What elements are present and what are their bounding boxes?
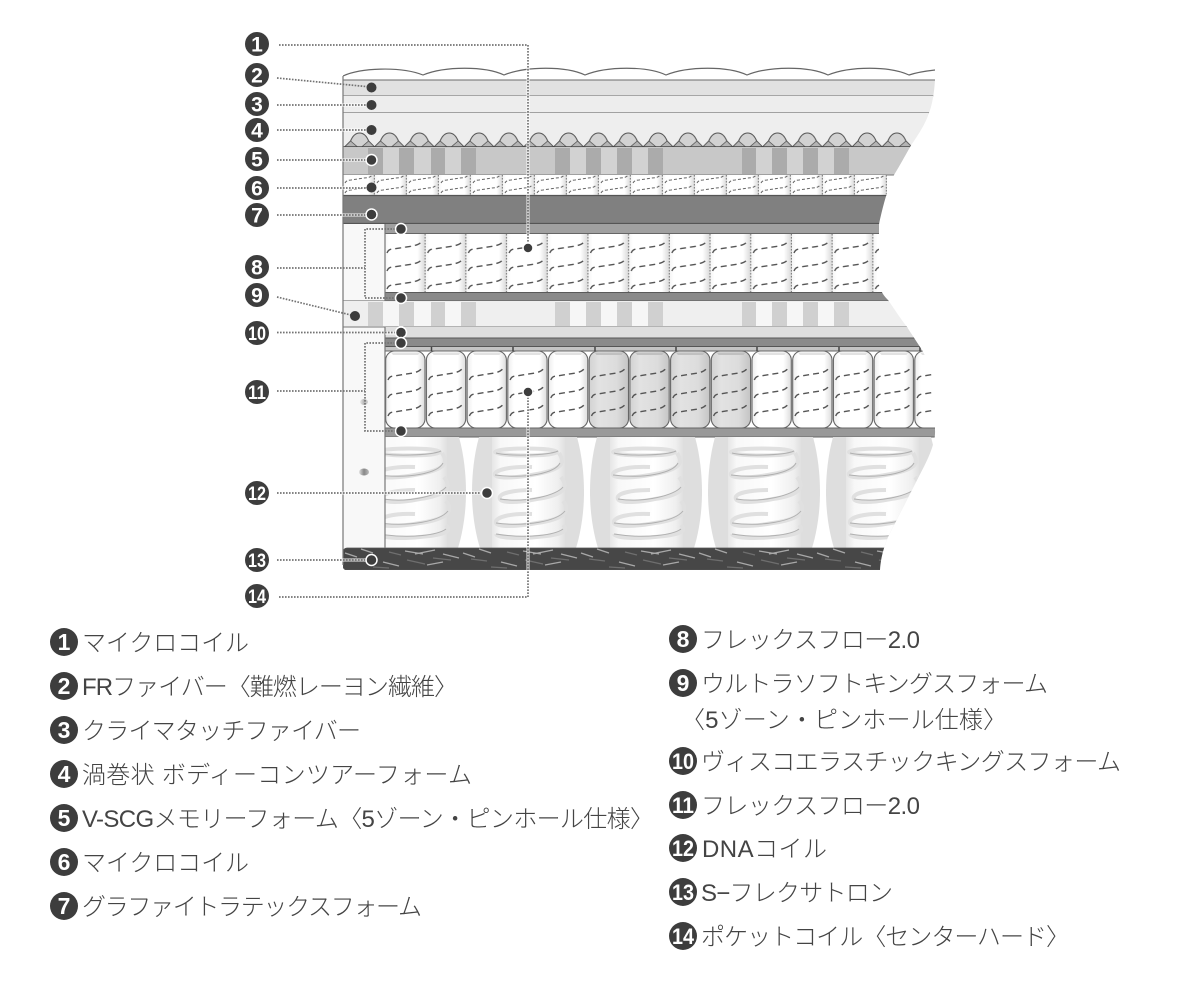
legend item 8: フレックスフロー2.0 xyxy=(701,627,920,654)
layer 3: climate touch fiber xyxy=(343,96,943,113)
legend item 9: 9 xyxy=(677,670,689,696)
legend item 14: 14 xyxy=(672,924,695,949)
diagram number badges: 9 xyxy=(251,284,263,308)
layer 8: flex flow 2.0 xyxy=(343,224,945,301)
legend item 4: 4 xyxy=(58,761,71,787)
layer 4: convoluted foam xyxy=(343,113,945,148)
legend item 13: 13 xyxy=(672,880,694,905)
legend item 11: フレックスフロー2.0 xyxy=(701,793,920,820)
diagram number badges: 1 xyxy=(251,34,263,56)
side panel outlines xyxy=(343,76,385,565)
mattress cross-section diagram xyxy=(343,68,954,570)
pinholes in side panel xyxy=(359,399,369,476)
layer 7: graphite latex foam xyxy=(343,195,943,224)
layer 13: S-flexatron base xyxy=(343,548,943,570)
legend item 6: 6 xyxy=(58,849,70,875)
diagram number badges: 8 xyxy=(251,256,263,280)
diagram number badges: 13 xyxy=(248,551,266,572)
legend item 13: S−フレクサトロン xyxy=(701,880,893,907)
pocket coils with DNA coil springs xyxy=(386,437,933,548)
layer 11: flex flow 2.0 bottom plate xyxy=(385,428,945,437)
diagram number badges: 10 xyxy=(248,324,266,345)
top quilted cover xyxy=(343,68,935,76)
legend item 4: 渦巻状 ボディーコンツアーフォーム xyxy=(82,762,472,789)
layer 5: V-SCG memory foam with pinhole strips xyxy=(343,147,943,175)
diagram number badges: 2 xyxy=(251,64,263,88)
legend item 12: DNAコイル xyxy=(702,836,827,863)
layer 2: FR fiber xyxy=(343,80,943,96)
legend item 10: ヴィスコエラスチックキングスフォーム xyxy=(701,749,1121,776)
side panel xyxy=(344,224,384,225)
legend item 3: 3 xyxy=(58,717,70,743)
legend: right column xyxy=(669,625,1121,951)
legend item 9 xyxy=(669,669,1048,734)
legend item 2: FRファイバー〈難燃レーヨン繊維〉 xyxy=(82,674,458,701)
legend item 3: クライマタッチファイバー xyxy=(82,718,361,745)
legend item 2: 2 xyxy=(58,673,70,699)
diagram number badges: 7 xyxy=(251,204,263,228)
legend item 5: V-SCGメモリーフォーム〈5ゾーン・ピンホール仕様〉 xyxy=(82,806,654,833)
legend item 1: マイクロコイル xyxy=(82,630,249,657)
legend item 14: ポケットコイル〈センターハード〉 xyxy=(701,924,1070,951)
diagram number badges: 12 xyxy=(248,484,266,505)
diagram number badges: 5 xyxy=(251,148,263,172)
leader lines xyxy=(277,45,528,597)
legend item 12: 12 xyxy=(672,836,694,861)
leader end markers xyxy=(350,82,533,566)
layer 11: flex flow 2.0 top plate xyxy=(385,338,945,351)
legend item 7: グラファイトラテックスフォーム xyxy=(82,894,422,921)
layer 10: viscoelastic king foam xyxy=(385,327,945,338)
legend item 8: 8 xyxy=(677,626,690,652)
legend item 5: 5 xyxy=(58,805,71,831)
diagram number badges: 4 xyxy=(251,120,263,142)
diagram number badges: 3 xyxy=(251,94,263,116)
layer 9: ultra soft king foam xyxy=(343,301,945,327)
diagram number badges: 6 xyxy=(251,178,263,200)
layer 6: micro coil xyxy=(343,175,887,195)
legend item 9: ウルトラソフトキングスフォーム xyxy=(701,671,1048,698)
diagram number badges xyxy=(245,32,269,608)
legend item 7: 7 xyxy=(58,893,70,919)
pocketed coils row xyxy=(386,351,954,428)
legend item 1: 1 xyxy=(58,629,71,655)
diagram number badges: 11 xyxy=(248,383,266,404)
diagram number badges: 14 xyxy=(248,587,266,608)
legend item 10: 10 xyxy=(672,749,694,774)
legend item 9: 〈5ゾーン・ピンホール仕様〉 xyxy=(681,707,1007,734)
legend: left column xyxy=(50,628,654,921)
legend item 11: 11 xyxy=(672,793,694,818)
legend item 6: マイクロコイル xyxy=(82,850,249,877)
